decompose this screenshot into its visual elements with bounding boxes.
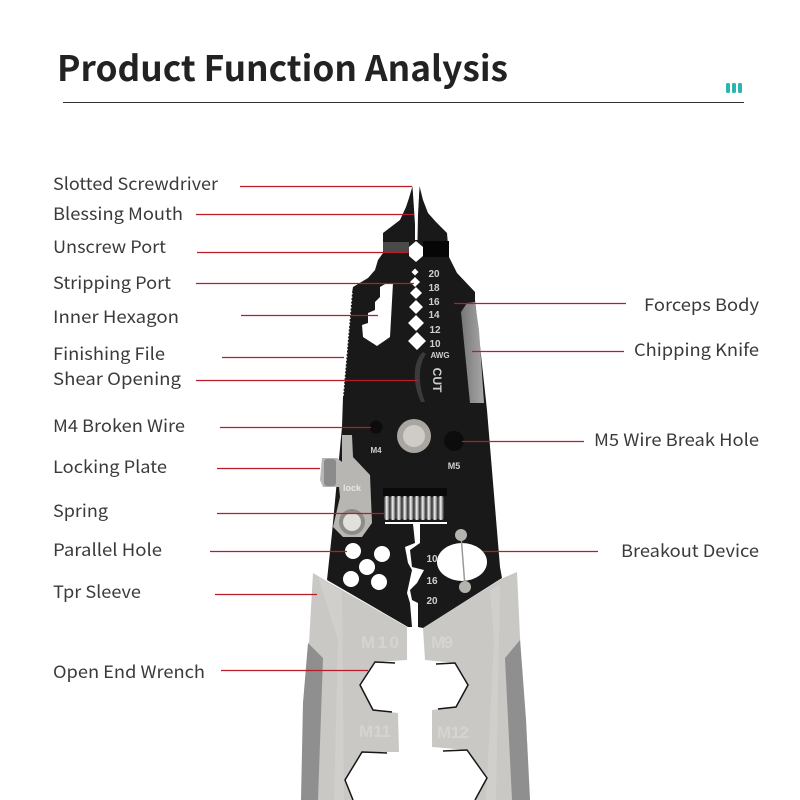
callout lines <box>196 186 626 670</box>
M4 hole <box>370 420 382 434</box>
left labels: Parallel Hole <box>53 536 162 561</box>
gauge numbers <box>428 269 450 393</box>
unscrew port <box>409 241 423 262</box>
left labels: Tpr Sleeve <box>53 578 141 603</box>
icon: teal bars <box>726 83 742 93</box>
left labels: Open End Wrench <box>53 658 205 683</box>
right handle sleeve: M12 <box>437 723 469 742</box>
left labels: Finishing File <box>53 340 165 365</box>
breakout device: 10 <box>426 554 438 565</box>
inner hexagon hole <box>362 283 393 346</box>
breakout device: 16 <box>426 576 438 587</box>
breakout device <box>426 529 487 607</box>
crimping slit <box>385 522 447 627</box>
gauge numbers: 16 <box>428 297 440 308</box>
gauge numbers: 20 <box>428 269 440 280</box>
right handle sleeve: M9 <box>431 633 453 652</box>
left labels: Shear Opening <box>53 365 181 390</box>
pivot rivet <box>397 419 431 453</box>
forceps body <box>327 186 502 628</box>
parallel holes <box>343 543 390 590</box>
left labels <box>53 170 218 683</box>
left labels: M4 Broken Wire <box>53 412 185 437</box>
left labels: Unscrew Port <box>53 233 167 258</box>
stripping diamonds <box>408 268 426 350</box>
right labels: Forceps Body <box>644 291 759 316</box>
M5 hole <box>444 431 464 451</box>
right handle sleeve <box>423 572 530 800</box>
shear opening <box>415 352 426 402</box>
right labels: Chipping Knife <box>634 336 759 361</box>
gauge numbers: 12 <box>429 325 441 336</box>
left handle sleeve <box>301 573 407 800</box>
left labels: Blessing Mouth <box>53 200 183 225</box>
left labels: Slotted Screwdriver <box>53 170 218 195</box>
file teeth <box>343 293 352 397</box>
left labels: Spring <box>53 497 108 522</box>
gauge numbers: 18 <box>428 283 440 294</box>
left labels: Locking Plate <box>53 453 167 478</box>
centre slit <box>412 186 420 240</box>
right labels: M5 Wire Break Hole <box>594 426 759 451</box>
right labels: Breakout Device <box>621 537 759 562</box>
left labels: Stripping Port <box>53 269 172 294</box>
locking plate <box>320 435 372 537</box>
gauge numbers: AWG <box>430 351 450 360</box>
left handle sleeve: M10 <box>361 633 399 652</box>
title: Product Function Analysis <box>57 41 508 92</box>
gauge numbers: 14 <box>428 310 440 321</box>
pliers illustration: M4 <box>370 446 382 455</box>
jaw bands <box>383 242 409 253</box>
pliers illustration: M5 <box>448 461 460 471</box>
chipping knife <box>461 302 484 403</box>
gauge numbers: CUT <box>430 368 444 393</box>
locking plate: lock <box>343 483 362 493</box>
breakout device: 20 <box>426 596 438 607</box>
right labels <box>594 291 759 562</box>
left labels: Inner Hexagon <box>53 303 179 328</box>
left handle sleeve: M11 <box>359 722 391 741</box>
spring <box>383 488 447 520</box>
pliers illustration <box>301 186 530 800</box>
gauge numbers: 10 <box>429 339 441 350</box>
